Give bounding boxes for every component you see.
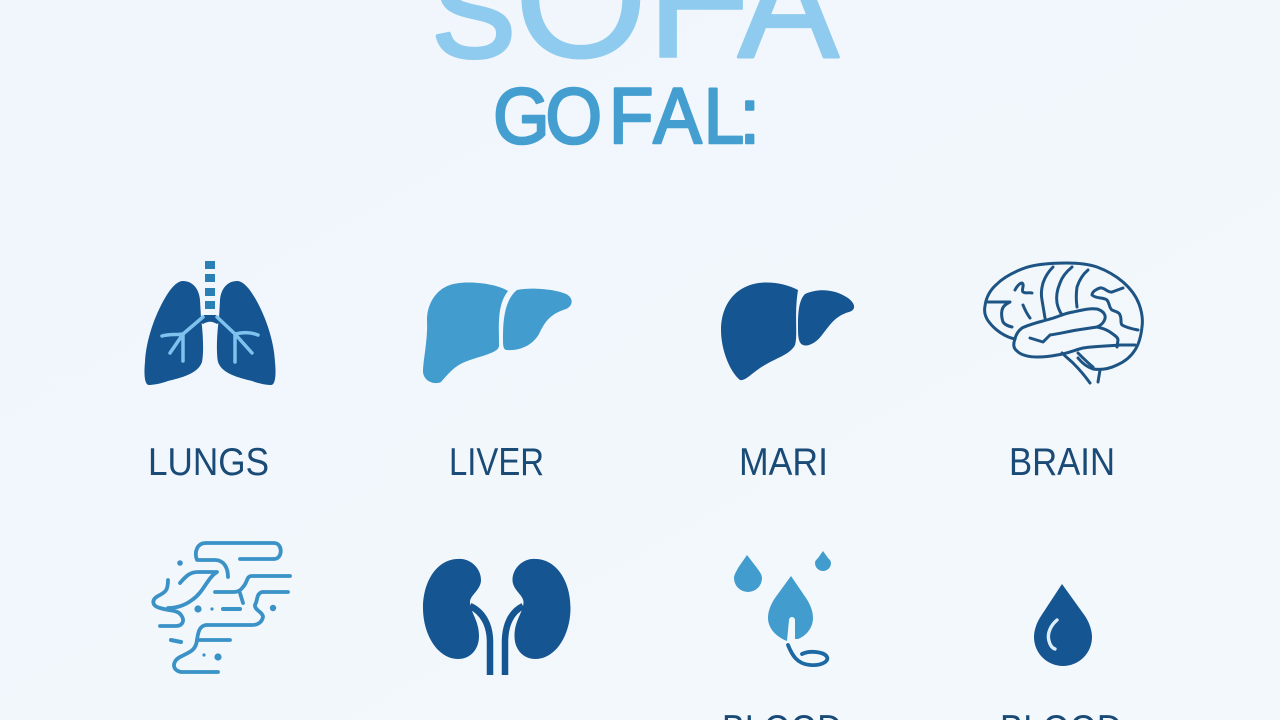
icon: abstract vessels: [153, 543, 290, 672]
icon: liver (dark): [721, 283, 854, 380]
label: LIVER: LIVER: [449, 441, 544, 484]
subtitle: GOFAL: GOFAL:: [493, 72, 760, 161]
icon: brain: [985, 263, 1142, 383]
icon: lungs: [144, 261, 276, 385]
icon: blood drops with tube: [734, 551, 831, 665]
icon: liver (light): [423, 283, 572, 383]
icon: kidneys: [423, 559, 570, 675]
label: MARI: MARI: [739, 441, 828, 484]
label: LUNGS: LUNGS: [148, 441, 269, 484]
icon: blood drop: [1034, 584, 1092, 666]
label: BRAIN: BRAIN: [1009, 441, 1115, 484]
